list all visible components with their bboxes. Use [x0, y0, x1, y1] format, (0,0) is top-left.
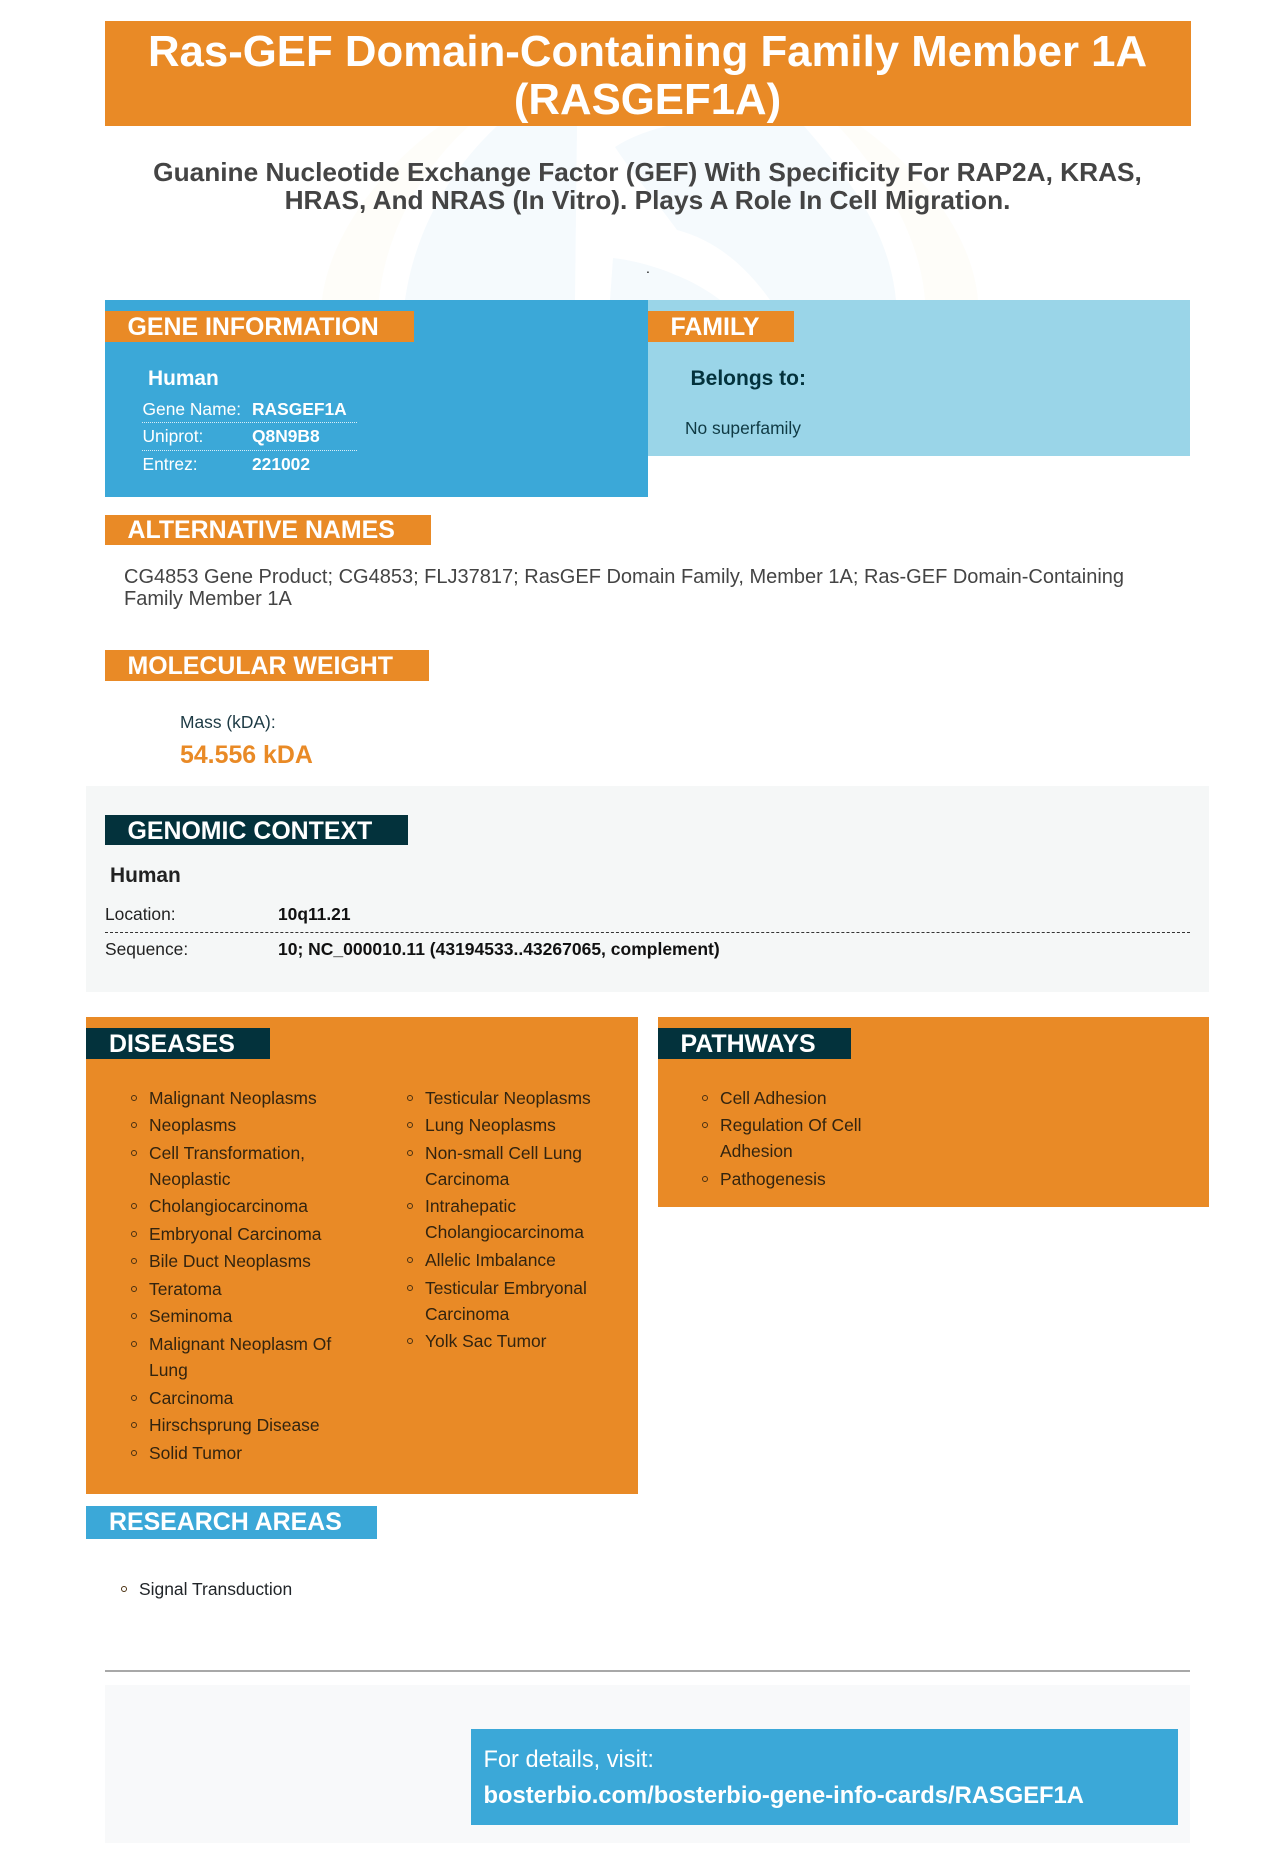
panel: gene information: RASGEF1A [252, 399, 347, 419]
subtitle [153, 157, 1142, 215]
molecular weight value [180, 712, 313, 769]
heading: genomic context: GENOMIC CONTEXT [128, 816, 372, 844]
disease list column 2: Allelic Imbalance [425, 1250, 556, 1270]
disease list column 1: Solid Tumor [149, 1443, 242, 1463]
species label: Human [110, 864, 181, 887]
superfamily text: No superfamily [685, 418, 801, 438]
molecular weight value: Mass (kDA): [180, 712, 276, 732]
heading: pathways [658, 1028, 851, 1059]
disease list column 1: Seminoma [149, 1306, 232, 1326]
callout: details link [471, 1729, 1178, 1825]
pathways list: Cell Adhesion [720, 1088, 827, 1108]
disease list column 1: Cholangiocarcinoma [149, 1196, 308, 1216]
heading: research areas [86, 1506, 377, 1539]
disease list column 1: Bile Duct Neoplasms [149, 1251, 311, 1271]
heading: diseases: DISEASES [109, 1030, 235, 1058]
heading: family: FAMILY [670, 312, 759, 340]
heading: family [648, 311, 794, 342]
footer panel [105, 1685, 1190, 1843]
panel: family [648, 300, 1190, 456]
title line 1: Ras-GEF Domain-Containing Family Member 1A [148, 27, 1147, 76]
pathways list: Regulation Of Cell [720, 1115, 862, 1135]
background logo watermark [405, 126, 896, 300]
alternative names text: CG4853 Gene Product; CG4853; FLJ37817; RasGEF Domain Family, Member 1A; Ras-GEF Domain-Containing [124, 566, 1124, 588]
subtitle: HRAS, And NRAS (In Vitro). Plays A Role In Cell Migration. [285, 185, 1010, 215]
heading: alternative names: ALTERNATIVE NAMES [128, 516, 395, 544]
disease list column 2: Carcinoma [425, 1169, 509, 1189]
disease list column 1: Cell Transformation, [149, 1143, 305, 1163]
panel: genomic context [86, 786, 1209, 992]
heading: gene information: GENE INFORMATION [128, 312, 379, 340]
pathways list [702, 1088, 862, 1189]
sequence row: Sequence: [105, 939, 188, 959]
research areas list: Signal Transduction [139, 1579, 292, 1599]
disease list column 2: Cholangiocarcinoma [425, 1222, 584, 1242]
disease list column 2: Testicular Neoplasms [425, 1088, 591, 1108]
pathways list: Adhesion [720, 1141, 793, 1161]
title banner [105, 21, 1191, 126]
disease list column 2: Carcinoma [425, 1304, 509, 1324]
disease list column 2: Yolk Sac Tumor [425, 1331, 546, 1351]
alternative names text: Family Member 1A [124, 588, 292, 610]
panel: gene information: Q8N9B8 [252, 426, 320, 446]
callout url: bosterbio.com/bosterbio-gene-info-cards/RASGEF1A [484, 1782, 1084, 1808]
panel: diseases [86, 1017, 638, 1494]
subtitle: Guanine Nucleotide Exchange Factor (GEF) With Specificity For RAP2A, KRAS, [153, 157, 1142, 187]
uniprot row: Uniprot: [142, 426, 203, 446]
disease list column 2: Testicular Embryonal [425, 1278, 587, 1298]
disease list column 1: Teratoma [149, 1279, 222, 1299]
title line 2: (RASGEF1A) [514, 75, 781, 124]
disease list column 1: Lung [149, 1360, 188, 1380]
entrez row: Entrez: [142, 454, 198, 474]
disease list column 2: Intrahepatic [425, 1196, 516, 1216]
panel: genomic context: 10; NC_000010.11 (43194533..43267065, complement) [278, 939, 720, 959]
stray period: . [646, 260, 650, 276]
panel: genomic context: 10q11.21 [278, 904, 351, 924]
disease list column 1: Carcinoma [149, 1388, 233, 1408]
disease list column 1: Neoplastic [149, 1169, 230, 1189]
belongs to label: Belongs to: [690, 367, 806, 390]
disease list column 1: Malignant Neoplasms [149, 1088, 317, 1108]
disease list column 1: Hirschsprung Disease [149, 1415, 320, 1435]
disease list column 2: Non-small Cell Lung [425, 1143, 582, 1163]
disease list column 1 [131, 1088, 332, 1463]
molecular weight value: 54.556 kDA [180, 741, 313, 769]
species label: Human [148, 367, 219, 390]
panel: pathways [658, 1017, 1209, 1207]
disease list column 2: Lung Neoplasms [425, 1115, 556, 1135]
alternative names text [124, 566, 1124, 610]
heading: diseases [86, 1028, 270, 1059]
disease list column 1: Embryonal Carcinoma [149, 1224, 322, 1244]
panel: gene information [105, 300, 648, 497]
pathways list: Pathogenesis [720, 1169, 826, 1189]
location row: Location: [105, 904, 176, 924]
panel: gene information: 221002 [252, 454, 310, 474]
heading: molecular weight: MOLECULAR WEIGHT [128, 652, 393, 680]
disease list column 2 [407, 1088, 591, 1351]
disease list column 1: Malignant Neoplasm Of [149, 1334, 331, 1354]
disease list column 1: Neoplasms [149, 1115, 236, 1135]
gene name row: Gene Name: [142, 399, 241, 419]
heading: pathways: PATHWAYS [680, 1030, 816, 1058]
heading: research areas: RESEARCH AREAS [109, 1508, 342, 1536]
callout label: For details, visit: [484, 1746, 654, 1772]
